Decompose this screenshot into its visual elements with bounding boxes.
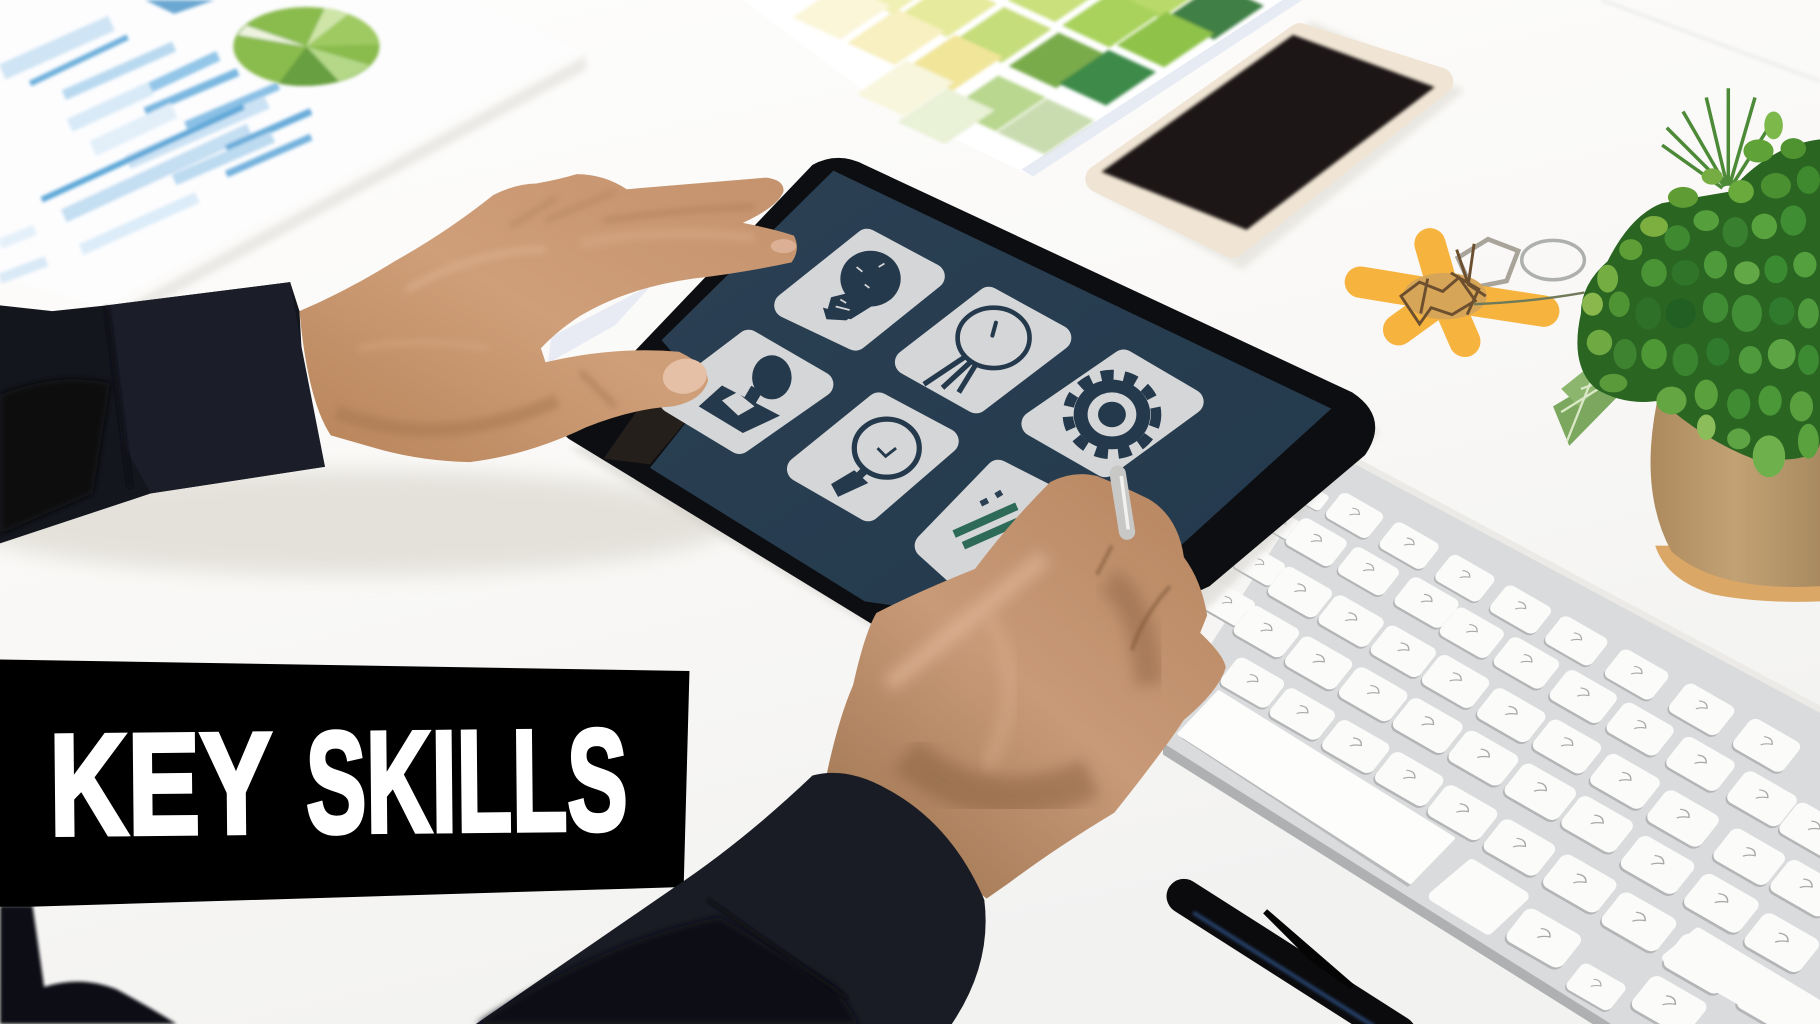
title text: SKILLS [305,699,628,863]
white sliver under hand [548,284,652,363]
tablet shadow [569,430,1381,650]
panel: tablet [564,158,1381,662]
bar chart on report [0,0,311,279]
panel: right hand [826,474,1226,899]
panel: left hand [299,174,797,462]
title text: KEY [49,703,273,866]
title banner [0,659,689,907]
thumb nail [660,355,710,397]
tile: gear [1034,362,1191,464]
hair and knuckle shading [888,546,1170,796]
tablet screen [650,171,1331,627]
title text [49,699,628,866]
knuckle and vein shading [337,192,754,430]
pie chart on report [233,7,380,86]
desk shading [0,0,1820,575]
panel: keyboard [1163,459,1820,1024]
foliage [1553,88,1820,477]
tile: bars [927,473,1074,578]
tile: magnifier [800,405,946,509]
key rows [1195,482,1820,1024]
panel: blurred report document [0,0,586,325]
tile: person stamp [672,342,821,441]
hand shape [299,174,797,462]
icon: smartphone [1097,21,1465,269]
silver ring [1118,474,1127,532]
panel: bottom-left dark sleeve [0,906,176,1024]
panel: potted plant [1553,88,1820,602]
icon: orange keychain [1360,239,1584,341]
tile: lightbulb [787,241,932,338]
plant pot [1651,389,1820,602]
tile: target gauge [908,300,1059,401]
long keys [1179,692,1820,1024]
swatch grid [793,0,1264,154]
panel: right sleeve [476,773,986,1024]
icon: black pen [1184,896,1399,1024]
tablet body [564,158,1375,662]
panel: left sleeve [0,282,325,543]
panel: colour swatch card [743,0,1302,176]
keyboard body [1163,459,1820,1024]
